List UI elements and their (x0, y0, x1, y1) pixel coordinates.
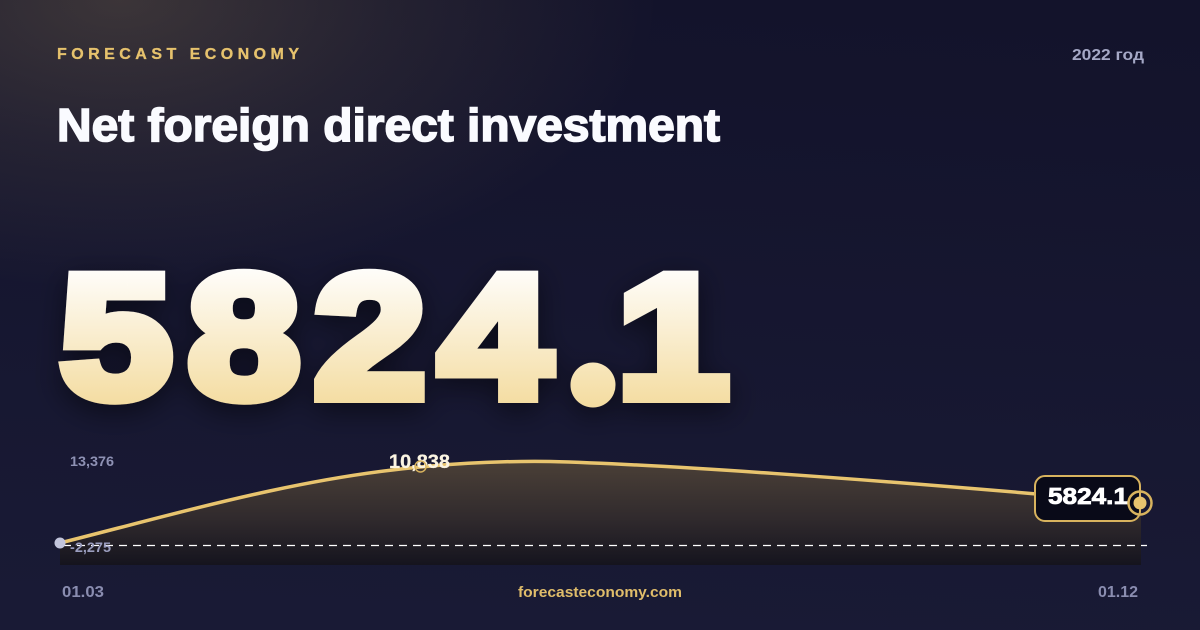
current value badge (1035, 476, 1140, 521)
year label: 2022 год (1072, 47, 1144, 64)
big value: 5824.1 (60, 238, 729, 434)
start date: 01.03 (62, 584, 104, 601)
source url: forecasteconomy.com (518, 584, 682, 601)
area fill under the line (60, 461, 1141, 565)
peak label: 10,838 (389, 451, 450, 473)
peak marker (415, 461, 426, 472)
zero dashed line (60, 544, 1147, 546)
axis max label: 13,376 (70, 453, 114, 469)
current value badge: 5824.1 (1048, 483, 1128, 509)
current point marker (1128, 492, 1152, 514)
chart (54, 451, 1152, 565)
brand label: FORECAST ECONOMY (57, 46, 299, 63)
end date: 01.12 (1098, 584, 1138, 601)
forecast line (60, 461, 1140, 543)
start point (54, 538, 66, 548)
title: Net foreign direct investment (57, 99, 720, 151)
axis min label: -2,275 (70, 539, 111, 555)
